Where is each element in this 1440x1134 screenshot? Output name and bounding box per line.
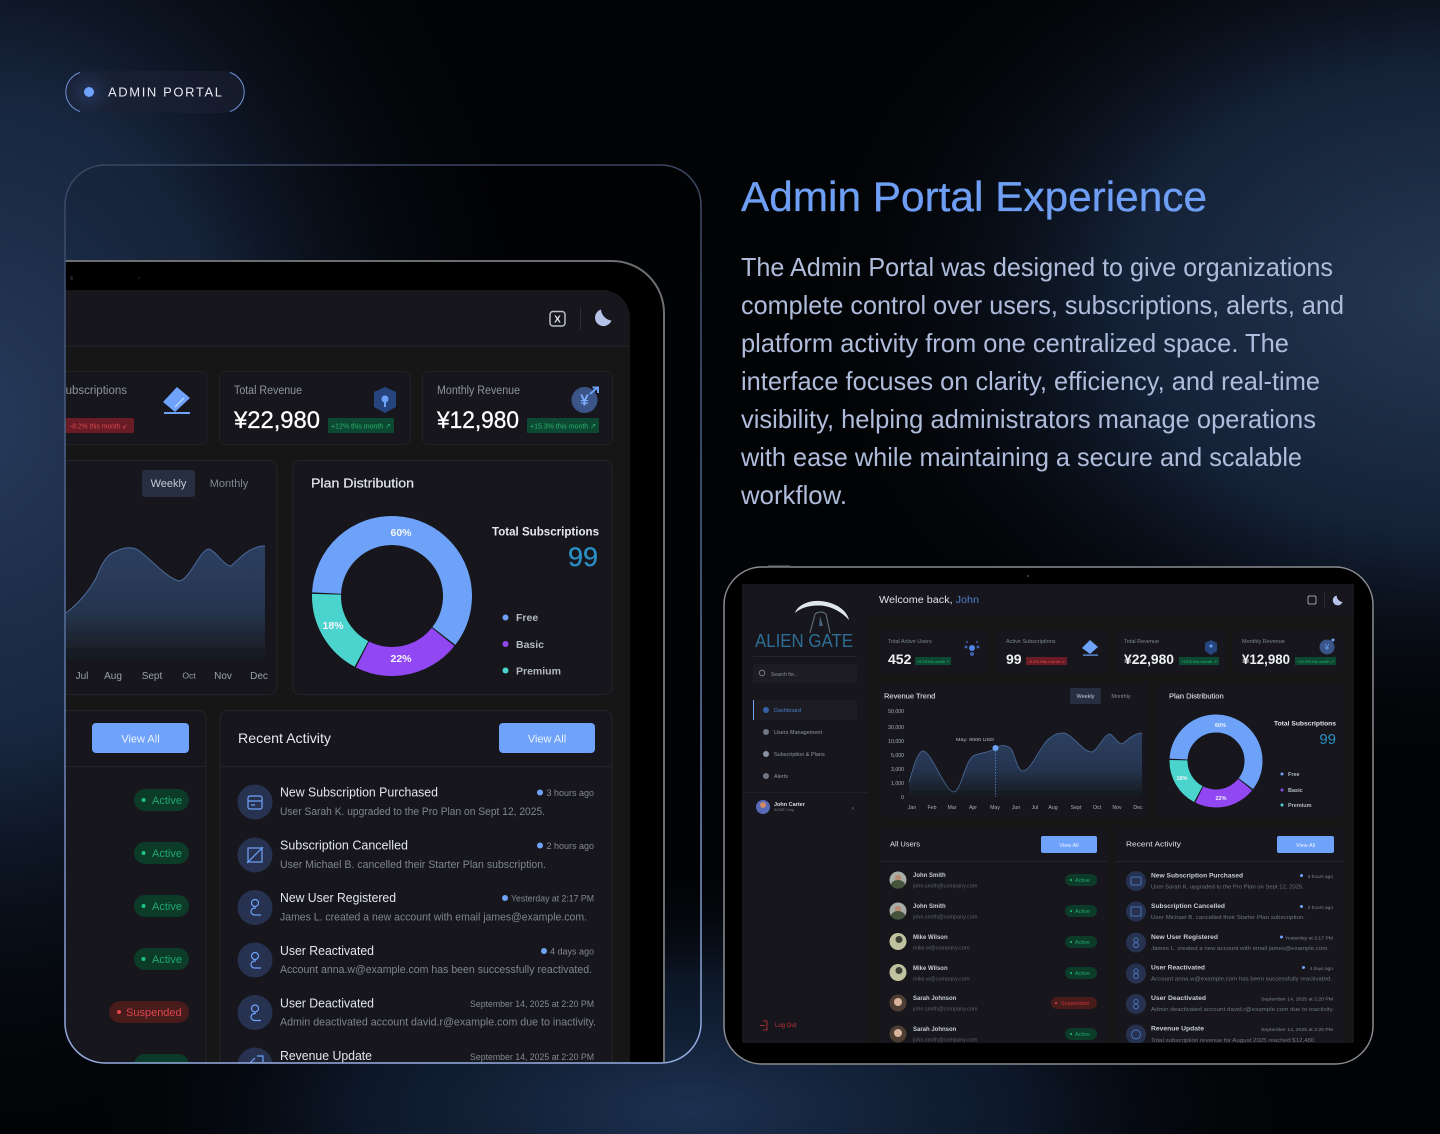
activity: subscription cancelled: 2 hours ago [546, 841, 594, 851]
stat card: monthly revenue [422, 372, 612, 444]
revenue trend chart: 50,000 [888, 709, 904, 715]
panel: plan distribution: 60% [390, 527, 412, 539]
card: monthly revenue: ¥12,980 [1242, 651, 1290, 667]
plan distribution panel: 60% [1215, 723, 1226, 729]
user rows: John Smith [913, 873, 946, 879]
panel: all users (cropped): Active [152, 954, 182, 966]
status pills: Active [1075, 878, 1090, 884]
icon: shield [374, 387, 396, 413]
panel: large tablet showcase [64, 164, 702, 1064]
badge: admin portal: ADMIN PORTAL [108, 84, 222, 100]
revenue trend chart: Mar [948, 805, 957, 811]
activity rows [1126, 871, 1335, 1044]
body paragraph: platform activity from one centralized space. The [741, 328, 1289, 358]
navigation [742, 700, 868, 793]
search box: Search for.. [771, 672, 797, 678]
stat card: total revenue: ¥22,980 [233, 407, 320, 434]
user rows: john.smith@company.com [912, 1038, 978, 1044]
activity rows: Admin deactivated account david.r@example.com due to inactivity. [1151, 1007, 1335, 1013]
user rows: Mike Wilson [913, 966, 948, 972]
user rows: Sarah Johnson [913, 1027, 957, 1033]
legend: Premium [516, 666, 561, 678]
icon: card [163, 387, 190, 414]
user rows: john.smith@company.com [912, 884, 978, 890]
panel: all users (cropped): Active [152, 901, 182, 913]
revenue trend chart: Dec [1133, 805, 1143, 811]
panel: recent activity [220, 710, 612, 1062]
card: total active users [879, 630, 990, 674]
sidebar [742, 584, 868, 1043]
activity: new subscription [238, 784, 594, 820]
user rows: mike.w@company.com [913, 946, 970, 952]
body paragraph: The Admin Portal was designed to give organizations [741, 252, 1333, 282]
panel: plan distribution: Plan Distribution [311, 476, 414, 490]
card: total revenue: +12% this month ↗ [1181, 659, 1217, 664]
card: total revenue: Total Revenue [1124, 639, 1159, 645]
stat card: total revenue: Total Revenue [234, 385, 302, 397]
activity rows: 4 days ago [1310, 966, 1333, 972]
panel: recent activity: View All [528, 734, 566, 746]
plan distribution panel: Total Subscriptions [1274, 720, 1336, 728]
area chart [66, 546, 265, 660]
status pills: Active [1075, 971, 1090, 977]
activity: subscription cancelled: User Michael B. cancelled their Starter Plan subscription. [280, 859, 546, 871]
logout [760, 1021, 797, 1030]
activity: user deactivated [238, 995, 596, 1030]
panel: plan distribution [293, 460, 612, 694]
stat cards [879, 630, 1343, 674]
activity: subscription cancelled: Subscription Cancelled [280, 838, 408, 852]
activity rows: September 14, 2025 at 2:20 PM [1261, 1027, 1333, 1033]
recent activity panel: View All [1296, 843, 1315, 849]
navigation: Dashboard [774, 708, 801, 714]
revenue trend chart: 5,000 [891, 753, 904, 759]
card: total active users: 452 [888, 651, 912, 667]
plan distribution panel: Basic [1288, 788, 1303, 794]
header bar [65, 290, 630, 346]
stat card: monthly revenue: Monthly Revenue [437, 385, 520, 397]
panel: all users (cropped) [66, 710, 206, 1062]
user profile: ACME Corp [774, 808, 794, 812]
revenue trend chart: Oct [1093, 805, 1102, 811]
activity: subscription cancelled [238, 838, 594, 872]
card: active subscriptions [997, 630, 1108, 674]
revenue trend chart: 10,000 [888, 739, 904, 745]
card: active subscriptions: Active Subscriptions [1006, 639, 1056, 645]
revenue trend chart: 30,000 [888, 725, 904, 731]
activity: new user [238, 890, 594, 925]
stat card: total revenue [220, 372, 410, 444]
plan distribution panel: 22% [1215, 796, 1227, 802]
activity rows: User Deactivated [1151, 995, 1206, 1002]
activity rows: September 14, 2025 at 2:20 PM [1261, 996, 1333, 1002]
revenue trend chart: Feb [928, 805, 937, 811]
activity: user reactivated [238, 942, 594, 978]
status pills: Active [1075, 940, 1090, 946]
card: monthly revenue: +15.3% this month ↗ [1297, 659, 1334, 664]
card: total active users: +8.2% this month ↗ [917, 659, 949, 664]
navigation: Alerts [774, 774, 788, 780]
activity: new user: James L. created a new account with email james@example.com. [280, 912, 587, 924]
activity: revenue update: September 14, 2025 at 2:20 PM [470, 1052, 594, 1062]
plan distribution panel: Free [1288, 772, 1300, 778]
body paragraph [740, 252, 1344, 510]
donut chart [323, 527, 461, 665]
revenue trend chart: Jul [1032, 805, 1038, 811]
revenue trend chart: 3,000 [891, 767, 904, 773]
card: active subscriptions: 99 [1006, 651, 1022, 667]
body paragraph: complete control over users, subscriptions, alerts, and [741, 290, 1344, 320]
activity: new subscription: 3 hours ago [546, 788, 594, 798]
body paragraph: with ease while maintaining a secure and scalable [740, 442, 1302, 472]
activity: new user: New User Registered [280, 891, 396, 905]
recent activity panel: Recent Activity [1126, 840, 1181, 848]
chart panel: revenue trend: Dec [250, 671, 268, 682]
chart panel: revenue trend: Weekly [151, 478, 187, 490]
logo: alien gate: ALIEN GATE [755, 631, 853, 651]
plan distribution panel: 99 [1319, 731, 1336, 748]
welcome header [879, 592, 1342, 608]
revenue trend chart: May [990, 805, 1000, 811]
card: total revenue: ¥22,980 [1124, 651, 1174, 667]
revenue trend chart: May: 8000 USD [956, 737, 995, 742]
activity rows: User Reactivated [1151, 964, 1205, 972]
activity rows: James L. created a new account with email james@example.com. [1151, 946, 1330, 952]
revenue trend chart: Apr [969, 805, 977, 811]
panel: all users (cropped): Active [152, 848, 182, 860]
status pills: Active [1075, 1032, 1090, 1038]
revenue trend chart: Revenue Trend [884, 692, 935, 700]
status pills: Suspended [1061, 1001, 1089, 1007]
icon: yen coin: ¥ [580, 392, 589, 410]
user rows: Sarah Johnson [913, 996, 957, 1002]
body paragraph: interface focuses on clarity, efficiency, and real-time [741, 366, 1320, 396]
tablet frame [66, 260, 665, 1062]
stat card: active subscriptions [66, 371, 208, 445]
activity: user reactivated: 4 days ago [550, 946, 594, 956]
activity: revenue update [238, 1048, 594, 1062]
chart panel: revenue trend: Sept [142, 671, 163, 682]
panel: all users (cropped): Active [152, 795, 182, 807]
card: total revenue [1115, 630, 1226, 674]
revenue trend chart: Jun [1012, 805, 1020, 811]
body paragraph: workflow. [740, 480, 847, 510]
panel: plan distribution: 22% [390, 653, 412, 665]
all users panel: View All [1059, 843, 1079, 849]
stat card: total revenue: +12% this month ↗ [331, 422, 391, 430]
navigation: Users Management [774, 730, 822, 736]
user rows: mike.w@company.com [913, 976, 970, 982]
activity rows: Revenue Update [1151, 1026, 1204, 1032]
revenue trend chart: Monthly [1111, 694, 1131, 700]
header bar: X [554, 314, 561, 326]
chart panel: revenue trend: Nov [214, 671, 232, 682]
plan distribution panel [1157, 682, 1344, 818]
revenue trend chart: Nov [1112, 805, 1122, 811]
panel: recent activity: Recent Activity [238, 730, 331, 746]
card: active subscriptions: -8.2% this month ↙ [1028, 659, 1065, 664]
chart panel: revenue trend: Aug [104, 671, 122, 682]
revenue trend chart: Weekly [1077, 694, 1095, 700]
chart panel: revenue trend: Monthly [210, 478, 249, 490]
activity rows: 3 hours ago [1308, 874, 1333, 880]
activity rows: New Subscription Purchased [1151, 872, 1243, 880]
logo: alien gate [753, 601, 857, 657]
revenue trend chart: Jan [908, 805, 916, 811]
user rows: Mike Wilson [913, 935, 948, 941]
chart panel: revenue trend [66, 460, 278, 695]
revenue trend chart: Sept [1071, 805, 1082, 811]
activity rows: Total subscription revenue for August 2025 reached $12,480. [1151, 1038, 1317, 1044]
activity rows: Subscription Cancelled [1151, 903, 1225, 910]
activity: user deactivated: User Deactivated [280, 996, 374, 1010]
status pills: Active [1075, 909, 1090, 915]
navigation: Subscription & Plans [774, 752, 825, 758]
stat card: monthly revenue: +15.3% this month ↗ [530, 422, 596, 430]
user rows: john.smith@company.com [912, 914, 978, 920]
revenue trend chart: 0 [901, 795, 904, 801]
welcome header: Welcome back, John [879, 595, 979, 606]
panel: all users (cropped): Suspended [126, 1007, 182, 1019]
card: total active users: Total Active Users [888, 639, 932, 645]
revenue trend chart: Aug [1048, 805, 1058, 811]
legend: Free [516, 612, 538, 624]
revenue trend chart: 1,000 [891, 781, 904, 787]
panel: all users (cropped): View All [121, 734, 160, 746]
user profile: John Carter [774, 802, 806, 808]
heading: Admin Portal Experience [741, 173, 1207, 220]
activity rows: Account anna.w@example.com has been successfully reactivated. [1151, 976, 1333, 982]
activity: new user: Yesterday at 2:17 PM [511, 894, 594, 904]
activity rows: New User Registered [1151, 934, 1218, 941]
recent activity panel [1115, 827, 1344, 1057]
body paragraph: visibility, helping administrators manage operations [741, 404, 1316, 434]
plan distribution panel: Plan Distribution [1169, 692, 1224, 700]
activity rows: User Sarah K. upgraded to the Pro Plan on Sept 12, 2025. [1151, 884, 1304, 890]
legend: Basic [516, 639, 544, 651]
status pills [1051, 874, 1097, 1040]
activity rows: User Michael B. cancelled their Starter Plan subscription. [1151, 915, 1306, 921]
activity rows: Yesterday at 2:17 PM [1285, 936, 1333, 942]
stat card: active subscriptions: Subscriptions [58, 385, 127, 397]
user profile [756, 800, 854, 814]
user rows: John Smith [913, 904, 946, 910]
tablet frame [724, 566, 1373, 1064]
card: monthly revenue: ¥ [1324, 643, 1330, 652]
user rows: john.smith@company.com [912, 1006, 978, 1012]
donut chart [1177, 722, 1255, 800]
small tablet device [724, 566, 1373, 1064]
activity rows: 2 hours ago [1308, 905, 1333, 911]
revenue trend chart [879, 682, 1149, 818]
icon: yen coin [572, 387, 598, 413]
panel: plan distribution: Total Subscriptions [492, 524, 599, 538]
badge: admin portal [65, 71, 245, 113]
search box [758, 670, 796, 676]
stat card: monthly revenue: ¥12,980 [436, 407, 519, 434]
activity: user deactivated: September 14, 2025 at 2:20 PM [470, 999, 594, 1009]
panel: plan distribution: 99 [568, 542, 598, 572]
chart panel: revenue trend: Oct [182, 670, 196, 680]
logout: Log Out [775, 1023, 797, 1029]
activity: user reactivated: Account anna.w@example.com has been successfully reactivated. [280, 964, 592, 976]
chart panel: revenue trend: Jul [76, 671, 88, 682]
plan distribution panel: Premium [1288, 803, 1312, 809]
activity: revenue update: Revenue Update [280, 1049, 372, 1063]
all users panel: All Users [890, 840, 920, 848]
user rows [890, 872, 978, 1044]
card: monthly revenue: Monthly Revenue [1242, 639, 1285, 645]
activity: new subscription: New Subscription Purchased [280, 786, 438, 800]
activity: user deactivated: Admin deactivated account david.r@example.com due to inactivity. [280, 1016, 596, 1028]
legend [502, 612, 561, 678]
stat card: active subscriptions: -8.2% this month ↙ [70, 422, 128, 430]
activity: new subscription: User Sarah K. upgraded to the Pro Plan on Sept 12, 2025. [280, 806, 545, 818]
all users panel [879, 827, 1108, 1057]
activity: user reactivated: User Reactivated [280, 944, 374, 958]
card: monthly revenue [1233, 630, 1343, 674]
plan distribution panel: 18% [1176, 776, 1188, 782]
panel: plan distribution: 18% [322, 620, 344, 632]
